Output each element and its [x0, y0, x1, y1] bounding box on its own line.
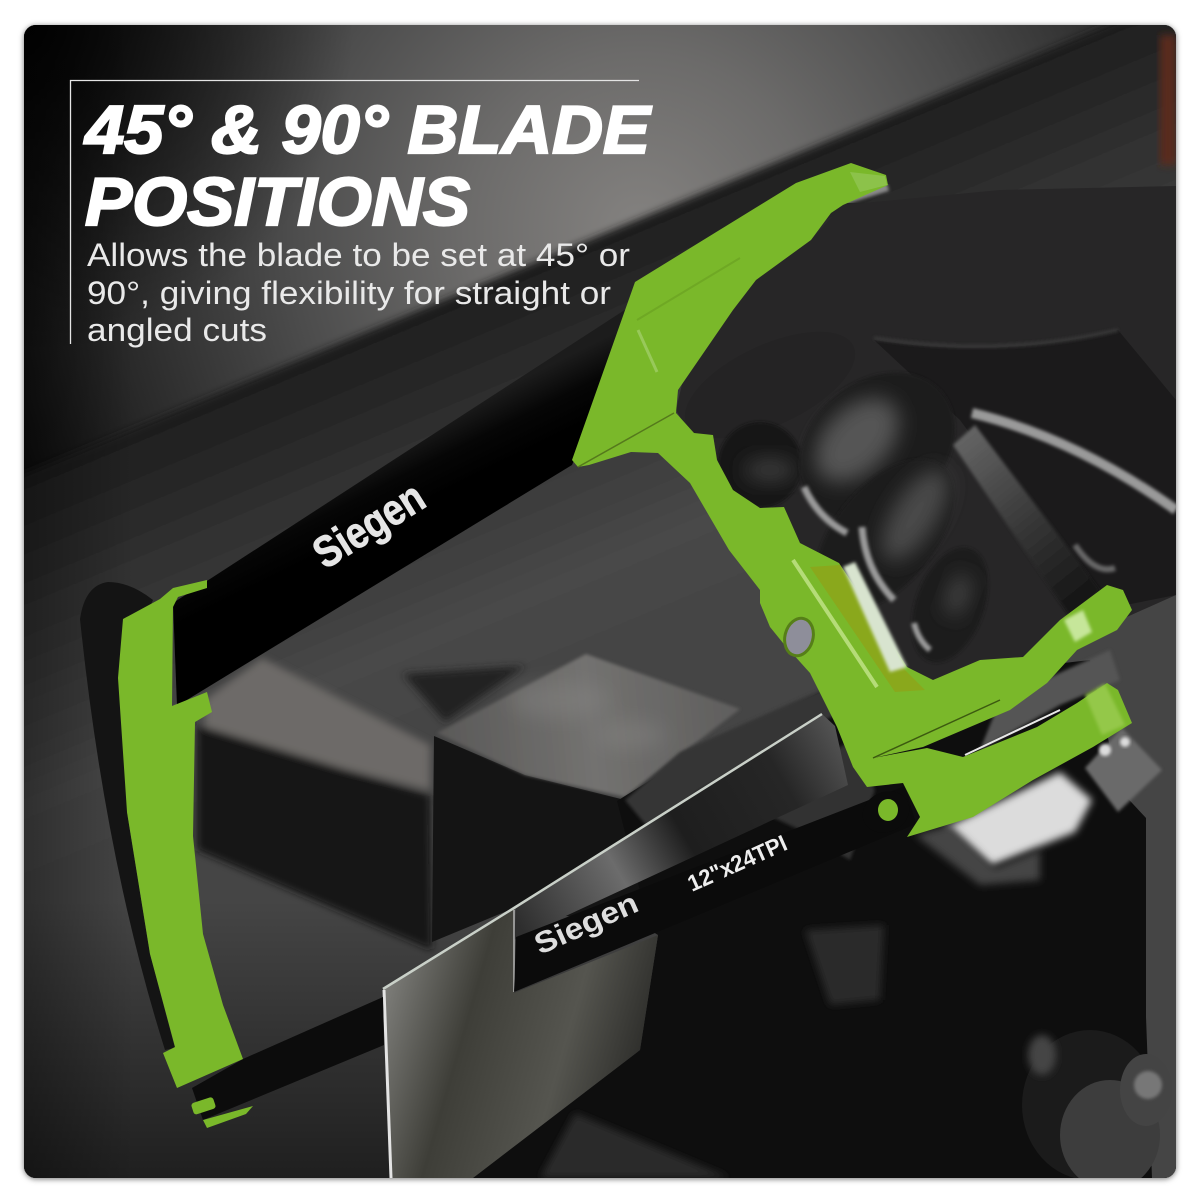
ribbed wrist strap [953, 425, 1100, 620]
title: POSITIONS [85, 164, 470, 240]
frame: front arm and handle [572, 163, 1132, 837]
saw blade [192, 800, 869, 1120]
hacksaw left grip shadow [80, 582, 175, 1050]
vice bolts [1085, 728, 1162, 812]
title [83, 92, 653, 240]
description text: Allows the blade to be set at 45° or [87, 237, 630, 273]
frame: bottom pin [192, 1097, 216, 1114]
metal sheet being cut [383, 714, 848, 1178]
title: 45° & 90° BLADE [83, 92, 653, 168]
frame: bottom lip [203, 1106, 253, 1128]
description text: 90°, giving flexibility for straight or [87, 275, 611, 311]
background: blurred blocks [197, 658, 525, 950]
description text: angled cuts [87, 312, 267, 348]
brand logo on bar: Siegen [304, 472, 434, 578]
reflective trim [804, 413, 1176, 650]
vice jaw block [432, 654, 740, 942]
hacksaw upper blade bar [173, 300, 640, 706]
blade label: brand: Siegen [529, 887, 643, 961]
vice highlight [945, 772, 1092, 866]
vice body [473, 650, 1172, 1190]
blade fixing pin [869, 796, 898, 821]
vice lower knob [1022, 1030, 1140, 1178]
cuff tip reflective [845, 187, 888, 200]
glove and hand [670, 186, 1176, 682]
heading frame lines [70, 80, 639, 344]
frame: left curved arm [118, 580, 243, 1088]
blade label: size: 12"x24TPI [683, 830, 791, 897]
frame shading details [578, 172, 1125, 758]
hacksaw green frame [118, 163, 1132, 1128]
thumb [670, 310, 870, 460]
glove cuff [874, 330, 1176, 610]
fingers [717, 374, 987, 662]
frame pivot rivet [783, 616, 815, 658]
description text [87, 237, 630, 348]
